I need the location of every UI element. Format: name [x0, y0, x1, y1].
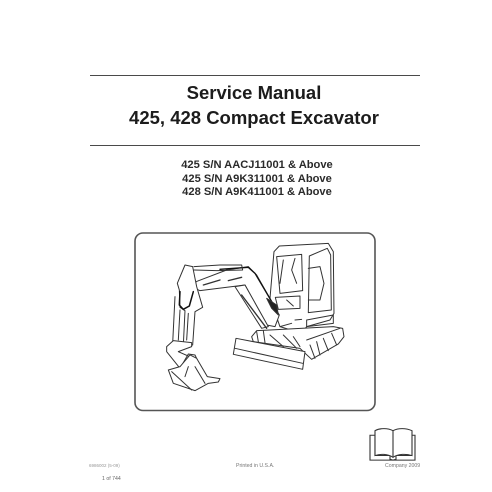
- subtitle: 425, 428 Compact Excavator: [129, 106, 379, 128]
- footer: company: Company 2009: [385, 462, 420, 468]
- serial number list: 425 S/N A9K311001 & Above: [182, 173, 332, 185]
- footer: part number: 6986002 (5-09): [89, 463, 120, 468]
- icon: open book: [369, 428, 416, 461]
- serial number list: 428 S/N A9K411001 & Above: [182, 186, 332, 198]
- bucket: [167, 341, 220, 391]
- icon: excavator: [167, 243, 344, 391]
- boom: [194, 265, 279, 328]
- cab: [270, 243, 334, 333]
- footer: page count: 1 of 744: [102, 476, 121, 482]
- blade and tracks: [233, 327, 344, 369]
- footer: printed in: Printed in U.S.A.: [236, 462, 274, 468]
- title: Service Manual: [187, 82, 321, 102]
- serial number list: 425 S/N AACJ11001 & Above: [181, 159, 333, 171]
- serial number list: [181, 159, 333, 198]
- arm: [173, 265, 203, 345]
